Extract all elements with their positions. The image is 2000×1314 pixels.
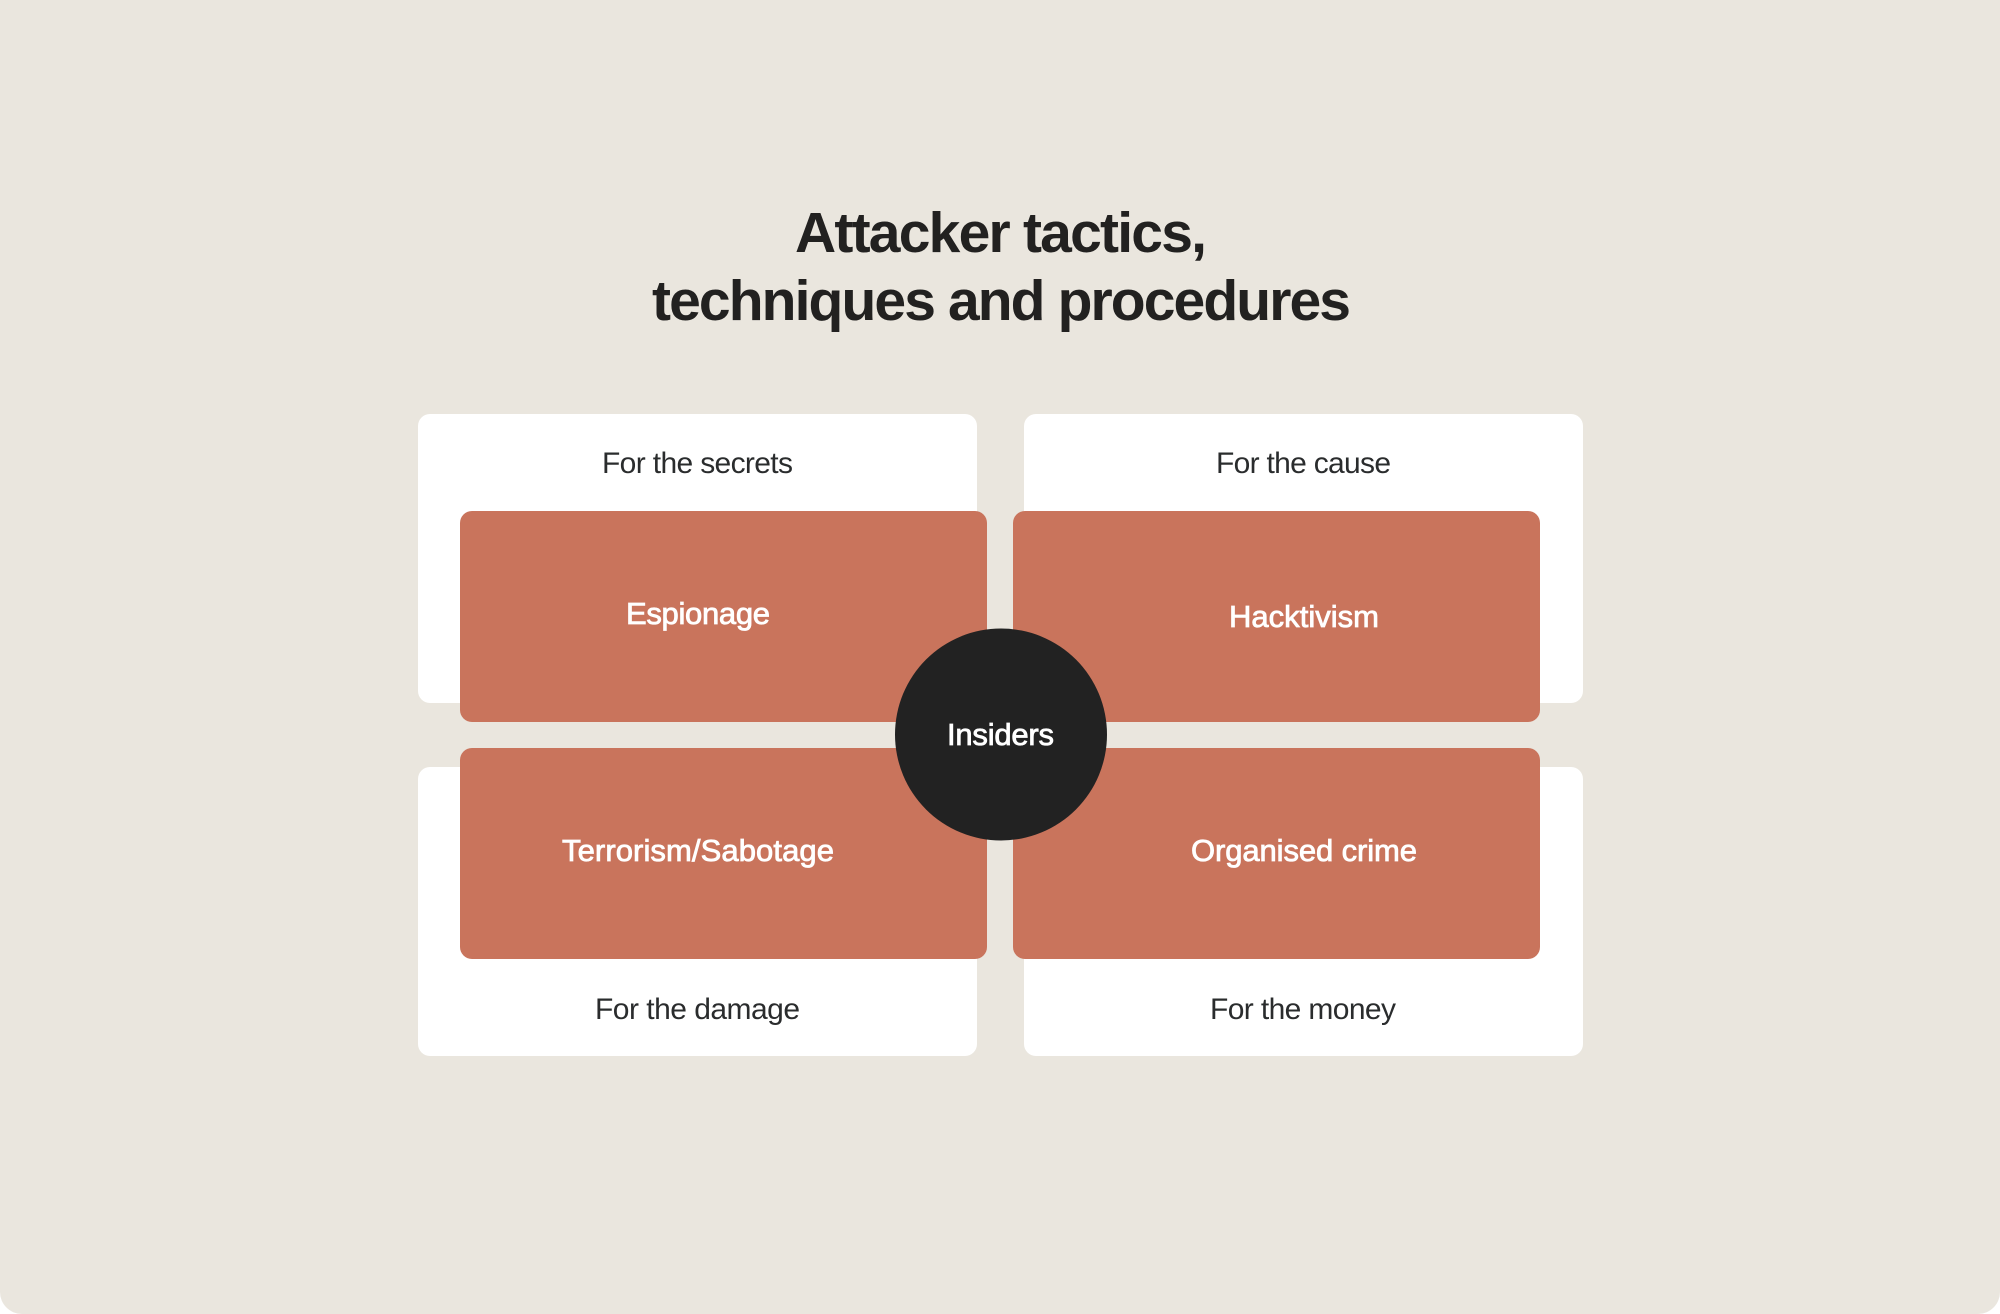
box: organised crime: Organised crime — [1191, 833, 1417, 868]
center circle: insiders: Insiders — [947, 717, 1054, 752]
panel: for the damage — [418, 767, 977, 1056]
box: hacktivism — [1013, 511, 1540, 722]
panel: for the cause: For the cause — [1216, 447, 1391, 480]
box: terrorism/sabotage — [460, 748, 987, 959]
box: terrorism/sabotage: Terrorism/Sabotage — [562, 833, 834, 868]
title — [652, 201, 1351, 333]
panel: for the money: For the money — [1210, 993, 1396, 1026]
box: espionage — [460, 511, 987, 722]
box: organised crime — [1013, 748, 1540, 959]
title: Attacker tactics, — [795, 201, 1207, 265]
panel: for the money — [1024, 767, 1583, 1056]
panel: for the damage: For the damage — [595, 993, 800, 1026]
box: espionage: Espionage — [626, 596, 770, 631]
title: techniques and procedures — [652, 269, 1351, 333]
panel: for the secrets — [418, 414, 977, 703]
panel: for the cause — [1024, 414, 1583, 703]
panel: for the secrets: For the secrets — [602, 447, 793, 480]
box: hacktivism: Hacktivism — [1229, 599, 1379, 634]
center circle: insiders — [895, 628, 1107, 840]
